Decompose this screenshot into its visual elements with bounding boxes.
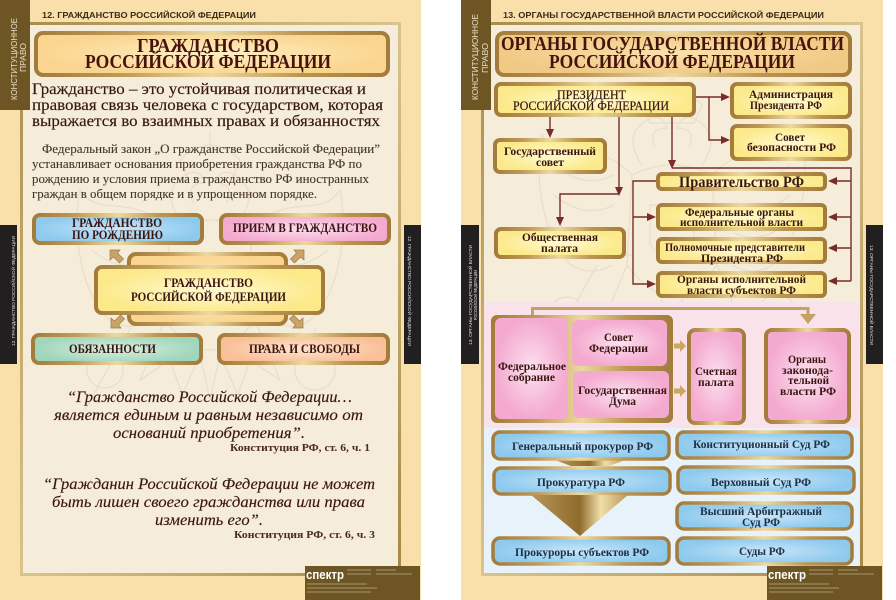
box: president bbox=[496, 84, 694, 115]
arrows: executive connections bbox=[546, 93, 851, 288]
title: ГРАЖДАНСТВО bbox=[137, 35, 279, 57]
box: duties: ОБЯЗАННОСТИ bbox=[69, 341, 156, 356]
paragraph: federal law: устанавливает основания приобретения гражданства РФ по bbox=[32, 157, 362, 171]
poster: citizenship bbox=[0, 0, 421, 600]
box: accounts chamber bbox=[689, 330, 744, 423]
box: federation council: Федерации bbox=[589, 341, 648, 355]
box: arbitration court: Высший Арбитражный bbox=[700, 504, 822, 518]
box: prosecutor general: Генеральный прокурор РФ bbox=[512, 439, 653, 453]
box: supreme court bbox=[678, 467, 854, 493]
connector: prosecutors trapezoid bbox=[555, 460, 625, 466]
box: admission: ПРИЕМ В ГРАЖДАНСТВО bbox=[233, 220, 377, 235]
quote 1: является единым и равным независимо от bbox=[53, 407, 363, 424]
box: state duma bbox=[573, 371, 669, 418]
box: president: ПРЕЗИДЕНТ bbox=[557, 87, 626, 102]
box: state council: совет bbox=[536, 155, 564, 169]
box: by birth: ПО РОЖДЕНИЮ bbox=[72, 227, 163, 242]
box: prosecutor general bbox=[493, 432, 669, 459]
box: regional executive bbox=[658, 272, 825, 297]
side tab: subject bbox=[0, 0, 30, 110]
box: plenipotentiaries: Президента РФ bbox=[701, 251, 783, 265]
logo bbox=[767, 566, 882, 600]
box: security council: безопасности РФ bbox=[747, 140, 836, 154]
box: civic chamber: Общественная bbox=[522, 230, 598, 244]
box: prosecutor office: Прокуратура РФ bbox=[537, 475, 625, 489]
side tab: subject: КОНСТИТУЦИОННОЕ bbox=[9, 18, 19, 100]
box: federal executive: исполнительной власти bbox=[680, 215, 803, 229]
quote 1: “Гражданство Российской Федерации… bbox=[67, 389, 352, 406]
box: central back bbox=[129, 254, 286, 324]
definition: выражается во взаимных правах и обязанностях bbox=[32, 113, 380, 130]
side tab: right black bbox=[866, 225, 883, 364]
box: plenipotentiaries: Полномочные представители bbox=[665, 240, 805, 254]
quote 2: “Гражданин Российской Федерации не может bbox=[43, 476, 375, 493]
box: duties bbox=[33, 335, 201, 363]
box: constitutional court bbox=[677, 432, 852, 458]
box: legislative bodies: законода- bbox=[782, 363, 833, 377]
box: supreme court: Верховный Суд РФ bbox=[711, 475, 811, 489]
box: legislative bodies bbox=[766, 330, 849, 422]
box: civic chamber bbox=[496, 229, 624, 257]
logo bbox=[305, 566, 420, 600]
arrows: to accounts chamber bbox=[674, 340, 686, 397]
box: legislative bodies: Органы bbox=[788, 352, 827, 366]
zone: judicial bbox=[484, 428, 859, 573]
box: regional executive: власти субъектов РФ bbox=[687, 283, 796, 297]
box: regional prosecutors bbox=[493, 538, 669, 564]
box: state council bbox=[495, 140, 605, 172]
side tab: left black: 13. ОРГАНЫ ГОСУДАРСТВЕННОЙ ВЛАСТИ bbox=[466, 245, 473, 345]
box: government: Правительство РФ bbox=[679, 174, 804, 191]
side tab: left black bbox=[0, 225, 17, 364]
side tab: left black bbox=[461, 225, 479, 364]
box: accounts chamber: Счетная bbox=[695, 364, 737, 378]
poster header: 12. ГРАЖДАНСТВО РОССИЙСКОЙ ФЕДЕРАЦИИ bbox=[42, 9, 256, 20]
triangle: prosecutors bbox=[531, 495, 628, 536]
box: arbitration court: Суд РФ bbox=[742, 515, 780, 529]
box: admission bbox=[221, 215, 389, 243]
side tab: subject bbox=[461, 0, 491, 110]
box: administration: Президента РФ bbox=[750, 98, 822, 112]
box: constitutional court: Конституционный Суд РФ bbox=[693, 437, 830, 451]
box: federal executive: Федеральные органы bbox=[685, 205, 795, 219]
box: accounts chamber: палата bbox=[698, 375, 734, 389]
logo: спектр bbox=[306, 567, 344, 582]
box: central citizenship: РОССИЙСКОЙ ФЕДЕРАЦИИ bbox=[131, 289, 286, 304]
side tab: subject: ПРАВО bbox=[480, 43, 490, 73]
quote 2: изменить его”. bbox=[155, 512, 263, 529]
definition: правовая связь человека с государством, которая bbox=[32, 97, 383, 114]
title bbox=[36, 33, 388, 75]
box: security council: Совет bbox=[775, 130, 805, 144]
box: civic chamber: палата bbox=[541, 241, 578, 255]
box: federation council bbox=[572, 320, 667, 366]
box: courts bbox=[677, 538, 852, 564]
box: prosecutor office bbox=[494, 468, 670, 494]
box: security council bbox=[732, 126, 850, 159]
side tab: subject: КОНСТИТУЦИОННОЕ bbox=[470, 14, 480, 100]
quote 2 bbox=[43, 476, 375, 541]
side tab: right black bbox=[404, 225, 421, 364]
box: rights: ПРАВА И СВОБОДЫ bbox=[249, 341, 360, 356]
box: arbitration court bbox=[677, 503, 852, 529]
box: federation council: Совет bbox=[604, 330, 633, 344]
paragraph: federal law: рождению и условия приема в гражданство РФ иностранных bbox=[32, 172, 370, 186]
box: administration bbox=[732, 84, 850, 117]
box: plenipotentiaries bbox=[658, 239, 825, 265]
box: federal executive bbox=[658, 205, 825, 229]
quote 2: Конституция РФ, ст. 6, ч. 3 bbox=[234, 530, 375, 541]
paragraph: federal law: граждан в общем порядке и в упрощенном порядке. bbox=[32, 187, 317, 201]
title: РОССИЙСКОЙ ФЕДЕРАЦИИ bbox=[549, 50, 795, 73]
box: federal assembly: собрание bbox=[508, 370, 556, 384]
box: federal assembly bbox=[495, 318, 568, 419]
side tab: subject: ПРАВО bbox=[18, 43, 28, 72]
box: administration: Администрация bbox=[749, 87, 833, 101]
title: ОРГАНЫ ГОСУДАРСТВЕННОЙ ВЛАСТИ bbox=[501, 32, 844, 55]
box: legislative bodies: власти РФ bbox=[780, 384, 836, 398]
box: federal assembly: Федеральное bbox=[498, 359, 567, 373]
box: central citizenship bbox=[96, 267, 323, 313]
quote 1: оснований приобретения”. bbox=[113, 425, 305, 442]
box: president: РОССИЙСКОЙ ФЕДЕРАЦИИ bbox=[513, 98, 669, 113]
logo: спектр bbox=[768, 567, 806, 582]
watermark: eagle bbox=[539, 75, 805, 355]
quote 2: быть лишен своего гражданства или права bbox=[52, 494, 365, 511]
box: by birth bbox=[34, 215, 202, 243]
panel frame bbox=[482, 24, 862, 574]
side tab: left black: РОССИЙСКОЙ ФЕДЕРАЦИИ bbox=[471, 270, 478, 320]
box: central citizenship: ГРАЖДАНСТВО bbox=[164, 275, 253, 290]
paragraph: federal law bbox=[32, 142, 380, 201]
poster header: 13. ОРГАНЫ ГОСУДАРСТВЕННОЙ ВЛАСТИ РОССИЙСКОЙ ФЕДЕРАЦИИ bbox=[503, 9, 824, 20]
watermark: eagle bbox=[77, 130, 343, 410]
box: regional executive: Органы исполнительной bbox=[677, 272, 806, 286]
box: legislative bodies: тельной bbox=[788, 373, 829, 387]
arrows: small gold bbox=[110, 250, 304, 328]
side tab: left black: 12. ГРАЖДАНСТВО РОССИЙСКОЙ ФЕДЕРАЦИИ bbox=[9, 236, 16, 346]
box: rights bbox=[219, 335, 388, 363]
box: state duma: Государственная bbox=[578, 383, 667, 397]
arrow: legislative link bbox=[532, 308, 816, 324]
quote 1: Конституция РФ, ст. 6, ч. 1 bbox=[230, 443, 370, 454]
side tab: right black: 13. ОРГАНЫ ГОСУДАРСТВЕННОЙ ВЛАСТИ bbox=[869, 245, 876, 345]
box: state council: Государственный bbox=[504, 144, 596, 158]
zone: legislative bbox=[484, 302, 859, 428]
panel frame bbox=[22, 24, 400, 574]
paragraph: federal law: Федеральный закон „О гражданстве Российской Федерации” bbox=[42, 142, 380, 156]
box: courts: Суды РФ bbox=[739, 544, 785, 558]
box: regional prosecutors: Прокуроры субъектов РФ bbox=[515, 545, 649, 559]
quote 1 bbox=[53, 389, 370, 454]
box: state duma: Дума bbox=[609, 394, 636, 408]
side tab: right black: 12. ГРАЖДАНСТВО РОССИЙСКОЙ ФЕДЕРАЦИИ bbox=[407, 236, 414, 346]
title bbox=[497, 32, 850, 75]
title: РОССИЙСКОЙ ФЕДЕРАЦИИ bbox=[85, 50, 331, 73]
poster: state authorities bbox=[461, 0, 883, 600]
definition bbox=[32, 81, 383, 130]
definition: Гражданство – это устойчивая политическая и bbox=[32, 81, 366, 98]
group: federal assembly bbox=[491, 315, 673, 423]
box: by birth: ГРАЖДАНСТВО bbox=[72, 215, 162, 230]
